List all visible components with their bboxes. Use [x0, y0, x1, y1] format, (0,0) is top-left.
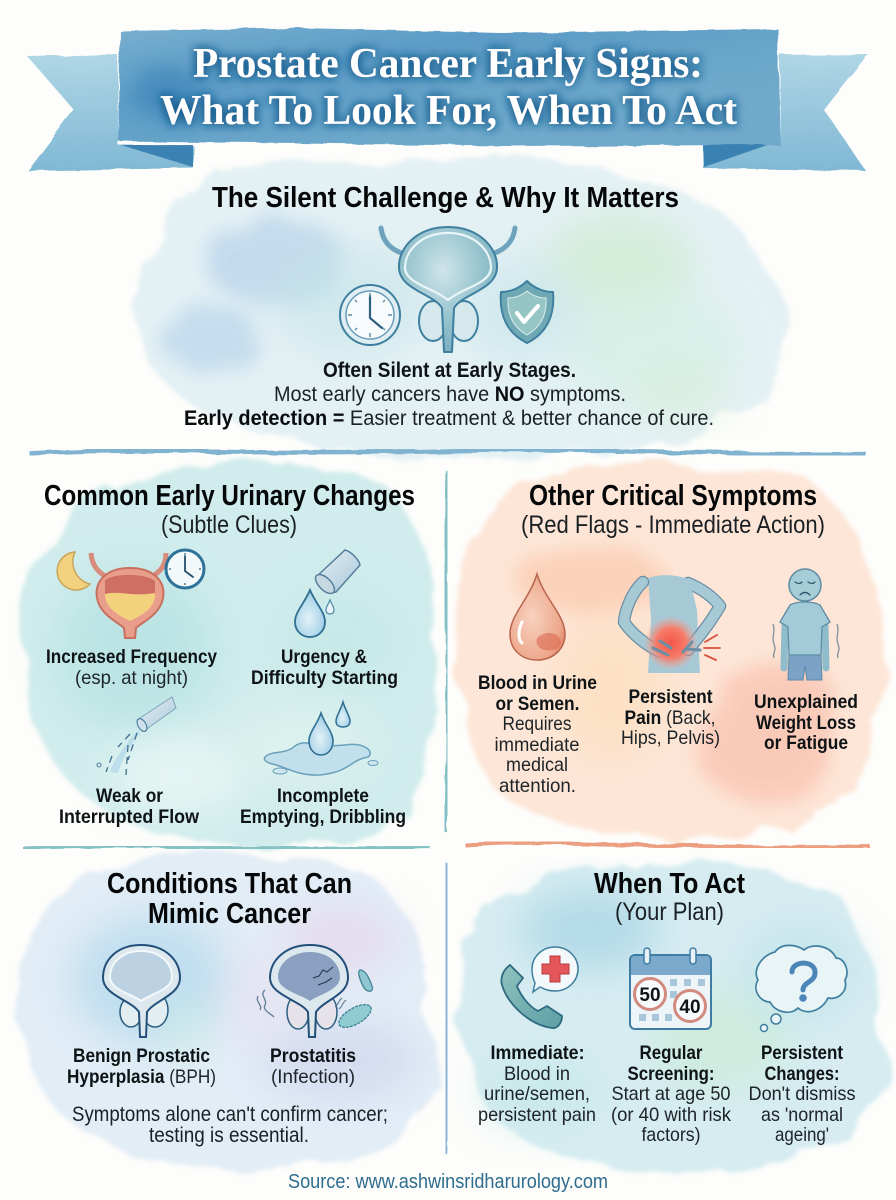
- label: incomplete emptying: Incomplete: [277, 785, 369, 807]
- label: immediate: [478, 1042, 596, 1126]
- label: incomplete emptying: Emptying, Dribbling: [240, 806, 406, 828]
- subheading: act: (Your Plan): [615, 898, 724, 926]
- heading: act: When To Act: [594, 868, 745, 900]
- label: regular screening: (or 40 with risk: [611, 1104, 731, 1126]
- panel: when to act: [459, 862, 890, 1173]
- wash: silent challenge: [131, 156, 789, 457]
- label: persistent changes: as 'normal: [761, 1104, 843, 1126]
- label: persistent pain: Pain (Back,: [624, 707, 716, 729]
- wash: critical: [456, 464, 888, 840]
- divider: vertical lower: [446, 862, 447, 1155]
- note: testing: [72, 1103, 388, 1147]
- label: persistent changes: ageing': [775, 1124, 829, 1146]
- label: BPH: [67, 1045, 216, 1088]
- label: regular screening: factors): [642, 1124, 700, 1146]
- heading: mimic: Mimic Cancer: [148, 898, 311, 930]
- label: urgency: Difficulty Starting: [251, 667, 398, 689]
- label: urgency: Urgency &: [281, 646, 367, 668]
- label: increased frequency: [46, 646, 217, 689]
- divider: top: [30, 450, 866, 454]
- panel: mimic conditions: [18, 853, 438, 1169]
- label: blood in urine: [478, 672, 597, 797]
- label: blood in urine: or Semen.: [496, 693, 580, 715]
- text block: silent challenge: Most early cancers have NO symptoms.: [274, 383, 626, 406]
- label: weight loss: Weight Loss: [756, 712, 856, 734]
- icon: blood drop: [510, 574, 565, 660]
- icon: tube and drips: [295, 550, 360, 637]
- label: persistent pain: Hips, Pelvis): [621, 727, 720, 749]
- text block: silent challenge: Early detection = Easier treatment & better chance of cure.: [184, 407, 714, 430]
- note: testing: testing is essential.: [149, 1124, 309, 1147]
- panel: critical symptoms: [456, 464, 888, 840]
- label: prostatitis: Prostatitis: [270, 1045, 356, 1067]
- label: persistent pain: [621, 686, 720, 749]
- subheading: urinary: (Subtle Clues): [161, 511, 297, 539]
- label: persistent pain: Persistent: [628, 686, 713, 708]
- label: incomplete emptying: [240, 785, 406, 828]
- wash: act: [459, 862, 890, 1173]
- label: persistent changes: [748, 1042, 856, 1146]
- label: weak flow: Interrupted Flow: [59, 806, 200, 828]
- heading: critical: Other Critical Symptoms: [529, 480, 817, 512]
- title: Prostate Cancer Early Signs:: [193, 41, 703, 87]
- label: prostatitis: [270, 1045, 356, 1088]
- label: regular screening: Start at age 50: [612, 1083, 731, 1105]
- icon: person with back pain: [624, 575, 720, 673]
- title: [160, 41, 737, 134]
- icon: BPH bladder: [103, 945, 180, 1037]
- panel: urinary changes: [22, 459, 438, 847]
- icon: calendar with ages: 40: [679, 997, 701, 1018]
- icon: prostatitis with bacteria: [257, 945, 375, 1037]
- heading: mimic: Conditions That Can: [107, 868, 352, 900]
- label: weak flow: Weak or: [96, 785, 163, 807]
- label: regular screening: [611, 1042, 731, 1146]
- label: immediate: Immediate:: [490, 1042, 584, 1064]
- icon: calendar with ages: 50: [639, 985, 661, 1006]
- label: immediate: urine/semen,: [484, 1083, 590, 1105]
- label: persistent changes: Changes:: [764, 1063, 840, 1085]
- label: increased frequency: Increased Frequency: [46, 646, 217, 668]
- label: blood in urine: attention.: [499, 775, 576, 797]
- label: weak flow: [59, 785, 200, 828]
- label: persistent changes: Don't dismiss: [748, 1083, 856, 1105]
- title: What To Look For, When To Act: [160, 88, 737, 134]
- heading: mimic: [107, 868, 352, 930]
- label: increased frequency: (esp. at night): [75, 667, 188, 689]
- icon: drops and puddle: [264, 702, 378, 775]
- panel: silent challenge: [131, 156, 789, 457]
- source line: Source: www.ashwinsridharurology.com: [288, 1171, 608, 1193]
- label: weight loss: or Fatigue: [764, 732, 848, 754]
- icon: bladder with moon and clock: [57, 550, 204, 638]
- icon: clock: [340, 285, 400, 345]
- wash: urinary: [22, 459, 438, 847]
- divider: left middle: [22, 846, 430, 849]
- ribbon body: [118, 28, 780, 146]
- icon: calendar with ages: [630, 948, 711, 1029]
- heading: urinary: Common Early Urinary Changes: [44, 480, 415, 512]
- label: immediate: Blood in: [504, 1063, 570, 1085]
- subheading: critical: (Red Flags - Immediate Action): [521, 511, 825, 539]
- label: blood in urine: immediate: [494, 734, 580, 756]
- label: blood in urine: medical: [506, 754, 568, 776]
- icon: thought cloud: [756, 945, 847, 1032]
- label: regular screening: Screening:: [628, 1063, 714, 1085]
- label: BPH: Hyperplasia (BPH): [67, 1066, 216, 1088]
- label: regular screening: Regular: [640, 1042, 703, 1064]
- heading: silent challenge: The Silent Challenge & Why It Matters: [212, 182, 679, 214]
- label: blood in urine: Requires: [502, 713, 572, 735]
- label: immediate: persistent pain: [478, 1104, 596, 1126]
- icon: weak stream: [97, 697, 176, 775]
- label: persistent changes: Persistent: [761, 1042, 843, 1064]
- divider: right middle: [465, 843, 870, 847]
- label: BPH: Benign Prostatic: [73, 1045, 210, 1067]
- ribbon tails: [28, 54, 868, 171]
- text block: silent challenge: Often Silent at Early Stages.: [323, 359, 576, 382]
- icon: bladder and prostate: [381, 227, 515, 352]
- icon: sad tired person: [773, 569, 839, 680]
- divider: vertical upper: [445, 470, 447, 832]
- icon: phone with medical bubble: [501, 947, 578, 1028]
- icon: shield with check: [501, 281, 553, 343]
- text block: silent challenge: [184, 359, 714, 430]
- label: blood in urine: Blood in Urine: [478, 672, 597, 694]
- banner: [28, 28, 868, 171]
- label: prostatitis: (Infection): [271, 1066, 355, 1088]
- note: testing: Symptoms alone can't confirm cancer;: [72, 1103, 388, 1126]
- wash: mimic: [18, 853, 438, 1169]
- label: weight loss: Unexplained: [754, 691, 858, 713]
- label: weight loss: [754, 691, 858, 754]
- label: urgency: [251, 646, 398, 689]
